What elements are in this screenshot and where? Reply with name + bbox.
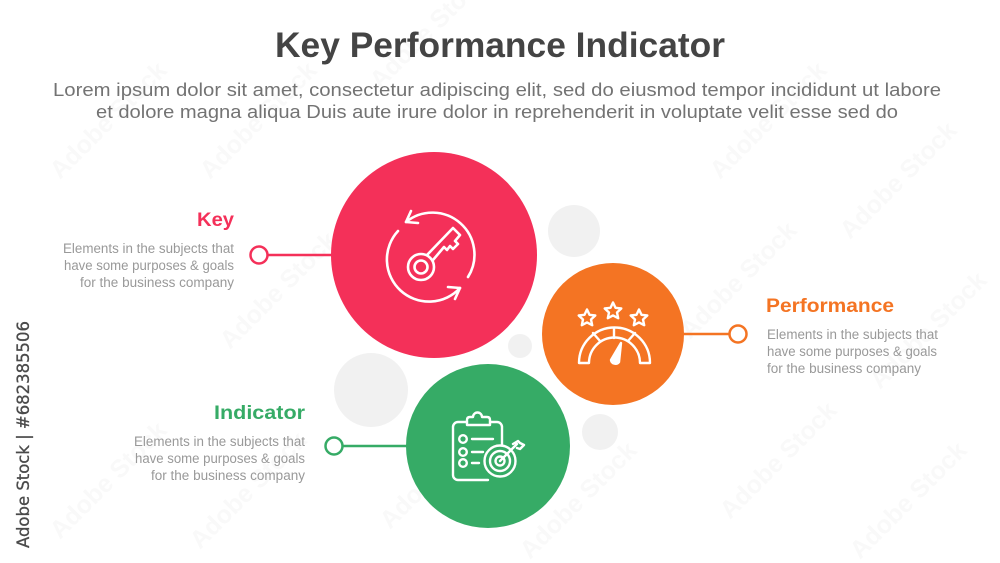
text: Adobe Stock	[844, 436, 972, 563]
connector: indicator	[326, 438, 410, 454]
text: Adobe Stock	[214, 226, 342, 354]
heading: performance: Performance	[766, 296, 894, 317]
subtitle: et dolore magna aliqua Duis aute irure dolor in reprehenderit in voluptate velit esse sed do	[96, 102, 898, 122]
connector: key	[250, 246, 335, 264]
heading: indicator: Indicator	[214, 403, 306, 424]
text: Adobe Stock	[514, 436, 642, 563]
text: Adobe Stock	[44, 416, 172, 544]
text: Adobe Stock	[704, 56, 832, 184]
text: indicator description: for the business company	[151, 468, 305, 483]
subtitle	[53, 80, 941, 122]
text: Adobe Stock	[194, 56, 322, 184]
circle: key	[331, 152, 537, 358]
text: indicator description	[134, 434, 305, 483]
icon: key with rotating arrows	[387, 211, 474, 302]
text: performance description	[767, 327, 938, 376]
heading: key: Key	[197, 210, 234, 231]
text: Adobe Stock	[674, 216, 802, 344]
text: Adobe Stock	[834, 116, 962, 244]
text: performance description: Elements in the subjects that	[767, 327, 938, 342]
circle: indicator	[406, 364, 570, 528]
text: Adobe Stock	[374, 406, 502, 534]
text: key description: Elements in the subjects that	[63, 241, 234, 256]
title: Key Performance Indicator	[275, 26, 725, 65]
circle: performance	[542, 263, 684, 405]
text: Adobe Stock	[184, 426, 312, 554]
icon: clipboard with target	[453, 412, 524, 480]
decorative grey bubbles	[334, 205, 618, 450]
panel: key	[63, 152, 537, 358]
panel: performance	[542, 263, 938, 405]
subtitle: Lorem ipsum dolor sit amet, consectetur adipiscing elit, sed do eiusmod tempor incididunt ut labore	[53, 80, 941, 100]
text: Adobe Stock	[44, 56, 172, 184]
text: indicator description: have some purposes & goals	[135, 451, 305, 466]
text: Adobe Stock	[714, 396, 842, 524]
icon: gauge with stars	[579, 302, 650, 364]
panel: indicator	[134, 364, 570, 528]
text: key description	[63, 241, 234, 290]
stock id side label: Adobe Stock | #682385506	[14, 321, 34, 548]
text: key description: have some purposes & goals	[64, 258, 234, 273]
text: indicator description: Elements in the subjects that	[134, 434, 305, 449]
text: Adobe Stock	[864, 266, 992, 394]
text: performance description: for the business company	[767, 361, 921, 376]
connector: performance	[680, 326, 746, 342]
text: performance description: have some purposes & goals	[767, 344, 937, 359]
text: key description: for the business company	[80, 275, 234, 290]
